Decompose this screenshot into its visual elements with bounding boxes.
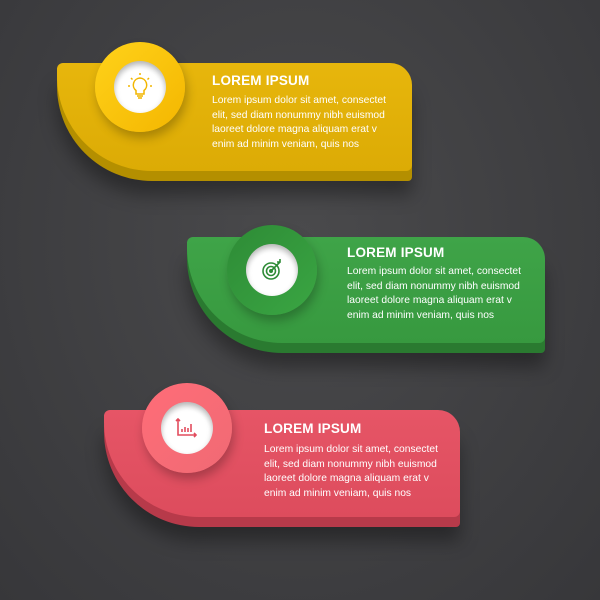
heading: LOREM IPSUM xyxy=(347,245,444,260)
icon: chart circle xyxy=(142,383,232,473)
icon: lightbulb circle xyxy=(95,42,185,132)
panel: green card xyxy=(184,225,548,371)
panel: red card xyxy=(102,383,464,544)
text block: laoreet dolore magna aliquam erat v xyxy=(212,124,377,135)
heading: LOREM IPSUM xyxy=(212,73,309,88)
text block xyxy=(212,95,386,150)
text block xyxy=(264,444,438,498)
panel: yellow card xyxy=(54,42,416,200)
text block: enim ad minim veniam, quis nos xyxy=(212,138,359,150)
text block: enim ad minim veniam, quis nos xyxy=(264,488,411,498)
text block: laoreet dolore magna aliquam erat v xyxy=(347,295,512,306)
heading: LOREM IPSUM xyxy=(264,421,361,436)
icon: target circle xyxy=(227,225,317,315)
text block: enim ad minim veniam, quis nos xyxy=(347,310,494,320)
text block xyxy=(347,266,521,320)
text block: Lorem ipsum dolor sit amet, consectet xyxy=(347,266,521,277)
text block: elit, sed diam nonummy nibh euismod xyxy=(264,458,437,470)
text block: elit, sed diam nonummy nibh euismod xyxy=(212,110,385,120)
text block: laoreet dolore magna aliquam erat v xyxy=(264,473,429,484)
text block: elit, sed diam nonummy nibh euismod xyxy=(347,280,520,292)
text block: Lorem ipsum dolor sit amet, consectet xyxy=(264,444,438,455)
text block: Lorem ipsum dolor sit amet, consectet xyxy=(212,95,386,106)
